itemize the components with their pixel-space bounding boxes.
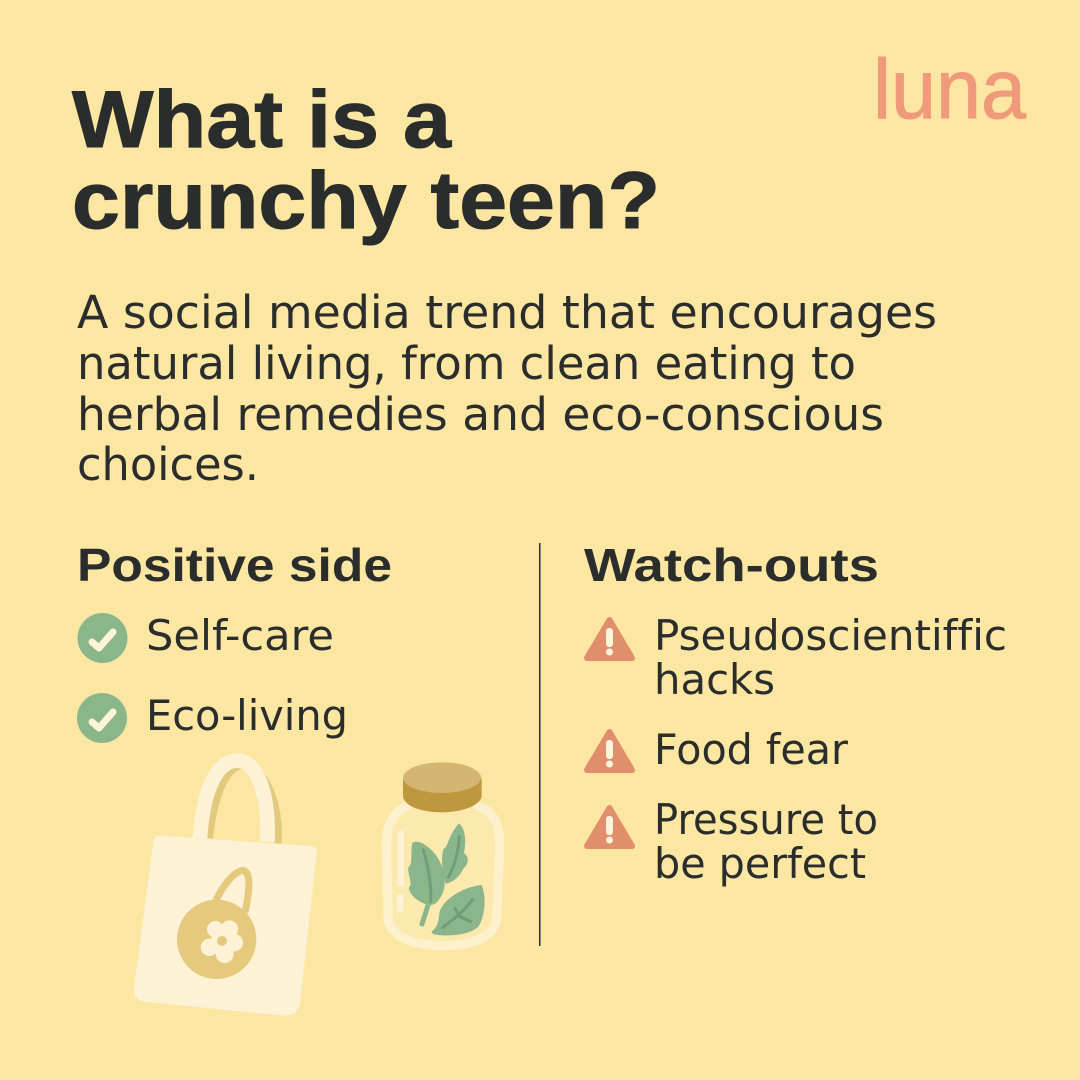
list item: pressure to be perfect: Pressure to	[654, 795, 878, 844]
logo: luna: luna	[873, 42, 1026, 136]
intro paragraph: A social media trend that encourages	[77, 286, 937, 339]
icon: tote bag	[134, 761, 317, 1016]
intro paragraph: natural living, from clean eating to	[77, 337, 856, 390]
list item: eco-living: Eco-living	[146, 691, 348, 740]
heading: watch-outs: Watch-outs	[584, 539, 879, 591]
list item: pseudoscientific hacks: Pseudoscientiffic	[654, 611, 1007, 660]
list item: pressure to be perfect: be perfect	[654, 839, 866, 888]
title	[72, 75, 660, 246]
list item: self-care	[78, 611, 334, 663]
list item: pressure to be perfect	[587, 795, 878, 888]
heading: positive side: Positive side	[77, 539, 392, 591]
panel: positive side	[77, 539, 392, 743]
intro paragraph: herbal remedies and eco-conscious	[77, 388, 884, 441]
list item: food fear: Food fear	[654, 725, 849, 774]
panel: watch-outs	[584, 539, 1007, 888]
intro paragraph	[77, 286, 937, 491]
list item: pseudoscientific hacks	[587, 611, 1007, 704]
intro paragraph: choices.	[77, 438, 259, 491]
divider	[539, 543, 540, 946]
title: What is a	[72, 75, 452, 165]
list item: self-care: Self-care	[146, 611, 334, 660]
list item: pseudoscientific hacks: hacks	[654, 655, 775, 704]
icon: jar with leaves	[386, 762, 500, 946]
list item: eco-living	[77, 691, 348, 743]
title: crunchy teen?	[72, 156, 660, 246]
